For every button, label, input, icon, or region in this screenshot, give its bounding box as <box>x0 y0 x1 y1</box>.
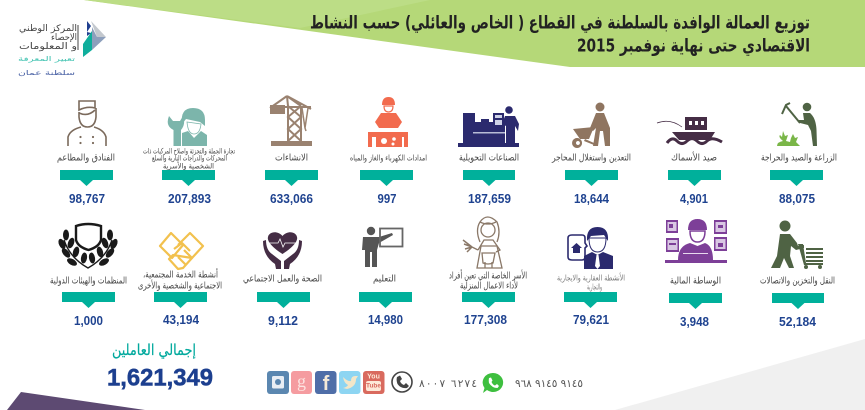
sector: community services <box>138 233 222 327</box>
sector: agriculture <box>761 103 837 206</box>
label: الأسر الخاصة التي تعين أفراد <box>449 268 527 282</box>
label: الانشاءات <box>275 152 308 164</box>
pointer bar <box>257 292 310 308</box>
label: الفنادق والمطاعم <box>57 152 115 164</box>
pointer bar <box>565 170 618 186</box>
value: 997 <box>378 192 397 206</box>
value: 207,893 <box>168 192 211 206</box>
pointer bar <box>772 293 824 309</box>
logo text: سلطنة عمان <box>18 69 75 77</box>
pointer bar <box>564 292 617 308</box>
logo mark <box>83 21 106 57</box>
pointer bar <box>669 293 722 309</box>
value: 9,112 <box>268 314 298 328</box>
icon: whatsapp <box>483 373 503 393</box>
label: الصناعات التحويلية <box>459 152 519 164</box>
icon: youtube <box>363 371 384 394</box>
logo text: و المعلومات <box>19 42 77 52</box>
value: 18,644 <box>574 192 609 206</box>
icon: farmer <box>777 103 817 146</box>
corner shape: bottom left <box>7 392 145 410</box>
value: 1,000 <box>74 314 103 328</box>
logo <box>18 21 106 77</box>
pointer bar <box>360 170 413 186</box>
pointer bar <box>62 292 115 308</box>
total label: إجمالي العاملين <box>112 341 196 360</box>
label <box>143 146 235 170</box>
icon: orange worker <box>368 97 408 147</box>
sector: financial intermediation <box>665 219 727 329</box>
value: 88,075 <box>779 192 815 206</box>
icon: facebook <box>315 371 336 395</box>
pointer bar <box>154 292 207 308</box>
icon: handshake <box>160 233 203 269</box>
icon: youtube: You <box>367 374 380 380</box>
value: 177,308 <box>464 313 507 327</box>
social and contact row <box>267 371 583 395</box>
value: 3,948 <box>680 315 709 329</box>
icon: finance worker with screens <box>665 219 727 263</box>
sector: construction <box>265 96 318 206</box>
label: الأنشطة العقارية والايجارية <box>557 272 625 282</box>
label: لأداء الاعمال المنزلية <box>460 280 518 292</box>
sector: private households <box>449 217 527 327</box>
value: 14,980 <box>368 313 403 327</box>
label: صيد الأسماك <box>671 152 717 164</box>
icon: facebook: f <box>323 373 330 395</box>
sector: mining <box>551 102 631 206</box>
icon: realtor <box>568 227 613 269</box>
sector: international organisations <box>50 224 127 328</box>
icon: instagram <box>267 371 289 394</box>
sector: transport and storage <box>760 220 835 329</box>
title: الاقتصادي حتى نهاية نوفمبر 2015 <box>577 36 810 56</box>
icon: chef <box>68 101 106 146</box>
icon: cart worker <box>771 220 823 269</box>
label: التعليم <box>373 274 396 284</box>
icon: teacher at board <box>362 227 402 267</box>
icon: twitter <box>339 371 360 394</box>
label: الصحة والعمل الاجتماعي <box>243 274 322 284</box>
icon: wheelbarrow worker <box>572 102 610 148</box>
label: الاجتماعية والشخصية والأخرى <box>138 280 222 292</box>
icon: boat <box>657 117 722 144</box>
corner shape: bottom right <box>615 339 865 410</box>
label: الزراعة والصيد والحراجة <box>761 152 837 164</box>
sector: education <box>359 227 412 327</box>
pointer bar <box>770 170 823 186</box>
label: المحركات والدراجات النارية والسلع <box>152 154 227 162</box>
phone number: ٨٠٠٧ ٦٢٧٤ <box>419 378 477 390</box>
label: التعدين واستغلال المحاجر <box>551 152 631 164</box>
title <box>310 12 810 56</box>
label: الوساطة المالية <box>670 276 721 286</box>
icon: housemaid <box>463 217 502 268</box>
label: تجارة الجملة والتجزئة واصلاح المركبات ذات <box>143 146 235 156</box>
pointer bar <box>60 170 113 186</box>
icon: youtube: Tube <box>366 382 381 390</box>
pointer bar <box>265 170 318 186</box>
total value: 1,621,349 <box>107 364 213 392</box>
value: 633,066 <box>270 192 313 206</box>
whatsapp number: ٩٦٨ ٩١٤٥ ٩١٤٥ <box>515 378 583 390</box>
logo text: المركز الوطني <box>19 24 77 34</box>
pointer bar <box>162 170 215 186</box>
sector: real estate <box>557 227 625 327</box>
icon: google plus <box>291 371 312 394</box>
sector: manufacturing <box>458 106 519 206</box>
icon: machine and worker <box>458 106 519 147</box>
icon: laurel and shield <box>57 224 119 268</box>
label <box>138 268 222 292</box>
icon: tower crane <box>270 96 312 146</box>
logo text: الإحصاء <box>51 33 77 43</box>
pointer bar <box>462 292 515 308</box>
pointer bar <box>463 170 515 186</box>
label: أنشطة الخدمة المجتمعية، <box>143 268 218 280</box>
sector: wholesale and vehicle repair <box>143 108 235 206</box>
icon: telephone <box>392 372 412 392</box>
label: امدادات الكهرباء والغاز والمياه <box>350 154 427 162</box>
value: 187,659 <box>468 192 511 206</box>
value: 52,184 <box>779 315 816 329</box>
label: النقل والتخزين والاتصالات <box>760 276 835 286</box>
pointer bar <box>668 170 721 186</box>
sector: utilities <box>350 97 427 206</box>
value: 79,621 <box>573 313 609 327</box>
icon: google plus: g <box>297 371 306 391</box>
sector: health and social work <box>243 232 322 328</box>
logo text: تعبير المعرفة <box>18 55 75 63</box>
label <box>557 272 625 292</box>
label: الشخصية والأسرية <box>163 160 214 170</box>
label: والتجارية <box>587 282 602 292</box>
sector: fishing <box>657 117 722 206</box>
label <box>449 268 527 292</box>
value: 98,767 <box>69 192 105 206</box>
label: المنظمات والهيئات الدولية <box>50 276 127 286</box>
logo text <box>18 24 77 77</box>
value: 4,901 <box>680 192 708 206</box>
logo divider <box>78 25 79 50</box>
icon: mechanic <box>168 108 207 146</box>
sector: hotels and restaurants <box>57 101 115 206</box>
total workers <box>107 341 213 392</box>
pointer bar <box>359 292 412 308</box>
header band <box>84 0 865 67</box>
value: 43,194 <box>163 313 199 327</box>
icon: heart in hands <box>263 232 302 269</box>
